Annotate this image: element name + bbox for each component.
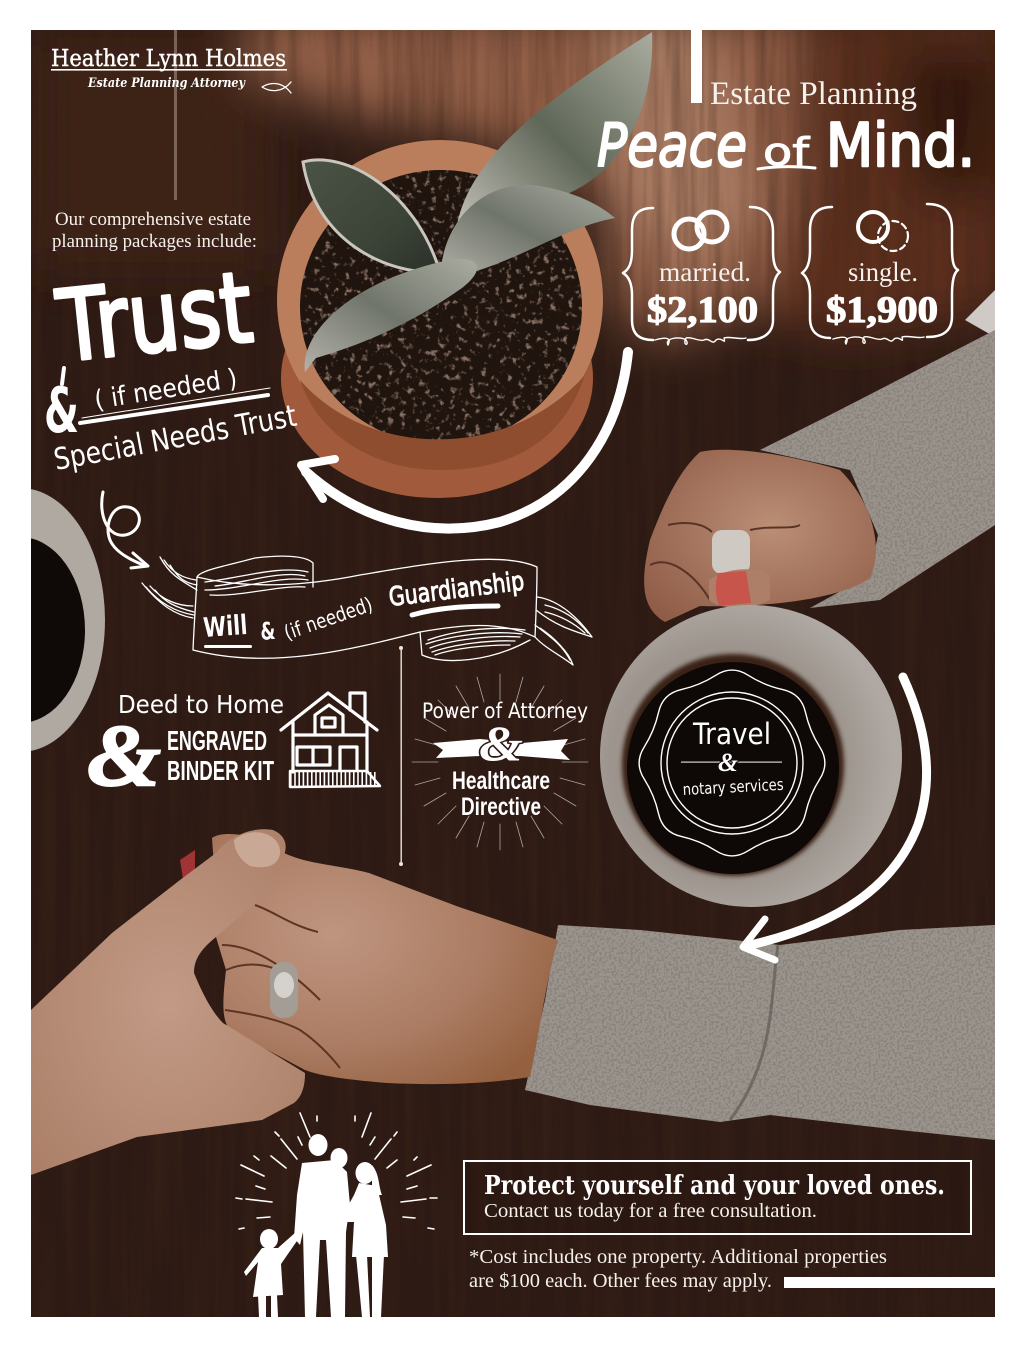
bar: top accent [691, 30, 702, 103]
text: notary services: notary services [682, 775, 784, 799]
braces [623, 207, 780, 340]
text: Directive: Directive [461, 793, 541, 821]
arrow: squiggle to will banner [102, 492, 148, 568]
text: if needed: (if needed) [281, 592, 376, 645]
text: ampersand: & [259, 617, 276, 646]
seal: travel and notary services [639, 670, 825, 856]
text: Deed to Home: Deed to Home [118, 690, 284, 719]
photo: plant leaves [303, 32, 652, 372]
footnote: *Cost includes one property. Additional properties [469, 1246, 887, 1268]
braces [802, 204, 958, 338]
arrow: curved from coffee to bottom [743, 677, 927, 960]
icon: single ring and dashed ring [858, 212, 908, 251]
wavy seal outline [639, 670, 825, 856]
arrow: curved from prices to trust [301, 352, 628, 529]
flourish [833, 336, 924, 344]
text: Healthcare: Healthcare [452, 767, 550, 795]
banner: Will and Guardianship [142, 556, 592, 665]
photo: arm and hand holding big mug [644, 285, 1000, 622]
ampersand: & [87, 708, 161, 805]
ampersand: & [44, 374, 79, 447]
text: Special Needs Trust: Special Needs Trust [51, 399, 300, 478]
photo: right hand with diamond ring [212, 834, 558, 1084]
ribbon [433, 739, 570, 760]
icon: fish [262, 82, 291, 93]
ribbon drawing [142, 556, 592, 665]
photo: big mug of black coffee [600, 605, 902, 907]
heading: Trust: Trust [52, 251, 257, 385]
price: 2100: $2,100 [647, 290, 758, 331]
footnote: are $100 each. Other fees may apply. [469, 1270, 772, 1292]
icon: family silhouette with rays [236, 1113, 437, 1317]
callout heading: Protect yourself and your loved ones. [484, 1171, 945, 1201]
ampersand: & [479, 715, 523, 771]
text block: deed and binder kit [87, 690, 380, 805]
price: 1900: $1,900 [826, 290, 938, 331]
text: if needed: ( if needed ) [92, 364, 239, 416]
text: Binder Kit: BINDER KIT [167, 755, 274, 786]
inner rings [661, 692, 803, 834]
figures [244, 1134, 388, 1317]
intro text: planning packages include: [52, 232, 257, 252]
sunburst rays [412, 674, 588, 850]
label: single: single. [848, 257, 918, 287]
photo: knit sleeve at bottom right [525, 925, 995, 1140]
flourish [655, 337, 746, 345]
title: Peace of Mind [597, 111, 975, 181]
ampersand: & [718, 748, 738, 777]
text: Will: Will [202, 610, 248, 644]
text: Engraved: ENGRAVED [167, 725, 267, 756]
double underline [80, 388, 270, 423]
photo: small coffee cup at left edge [31, 489, 105, 751]
badge: power of attorney and healthcare directive [412, 674, 588, 850]
callout subtext: Contact us today for a free consultation. [484, 1200, 817, 1222]
text: Guardianship: Guardianship [387, 567, 526, 613]
callout: protect yourself [464, 1161, 971, 1234]
logo: Heather Lynn Holmes [51, 46, 291, 93]
heading: Estate Planning: Estate Planning [710, 76, 917, 112]
package: married [623, 207, 780, 345]
text: Power of Attorney: Power of Attorney [422, 699, 588, 723]
title: Peace of Mind: Peace [597, 111, 747, 181]
callout frame [464, 1161, 971, 1234]
photo: terracotta pot and saucer [277, 140, 603, 498]
divider [681, 762, 782, 763]
title: Peace of Mind: Mind. [826, 111, 975, 181]
package: single [802, 204, 958, 344]
text block: Trust and Special Needs Trust [44, 251, 300, 478]
bar: bottom accent [784, 1277, 995, 1288]
divider line with end dots [399, 646, 403, 866]
text: Travel: Travel [692, 717, 771, 751]
icon: house [281, 693, 380, 787]
label: married: married. [659, 257, 751, 287]
photo: left hand with thumb [31, 829, 305, 1175]
attorney subtitle: Estate Planning Attorney [87, 76, 246, 91]
title: Peace of Mind: of [763, 130, 811, 174]
rays [236, 1113, 437, 1229]
attorney name: Heather Lynn Holmes [51, 46, 286, 72]
icon: wedding rings [674, 212, 727, 249]
intro text: Our comprehensive estate [55, 210, 251, 230]
